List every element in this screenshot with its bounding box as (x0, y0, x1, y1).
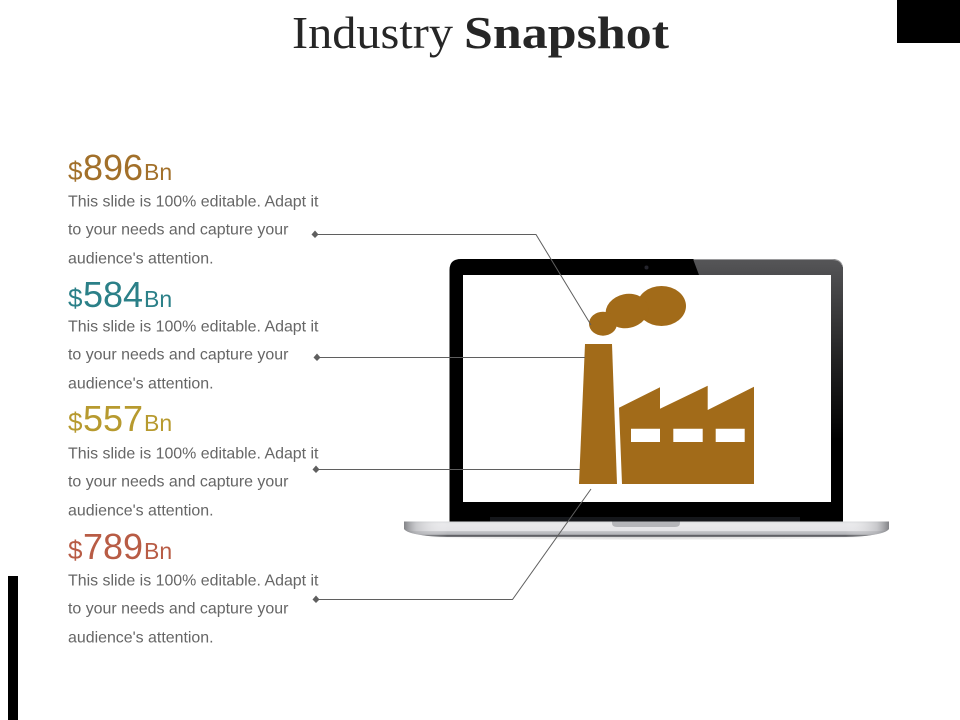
connector end markers (312, 230, 320, 603)
description 4: audience's attention. (68, 630, 214, 646)
decorative bar: bottom left (8, 576, 18, 720)
description 2: to your needs and capture your (68, 346, 289, 364)
description 1: This slide is 100% editable. Adapt it (68, 194, 319, 210)
title: Snapshot (464, 7, 670, 58)
value 896: $ (68, 156, 83, 186)
value 557: Bn (144, 410, 172, 436)
webcam (644, 266, 648, 270)
laptop base (404, 522, 889, 543)
value 896: 896 (83, 147, 143, 188)
value 584: Bn (144, 286, 172, 312)
chimney (579, 344, 617, 484)
description 2: This slide is 100% editable. Adapt it (68, 318, 319, 336)
stat block 2 (68, 274, 319, 392)
laptop illustration (404, 259, 889, 543)
description 4: This slide is 100% editable. Adapt it (68, 572, 319, 590)
connector 2 (317, 356, 585, 358)
connector 3 (316, 468, 580, 470)
description 3: to your needs and capture your (68, 474, 289, 490)
description 3: This slide is 100% editable. Adapt it (68, 446, 319, 462)
connector 4 (316, 489, 591, 600)
value 789: $ (68, 535, 83, 565)
description 1: to your needs and capture your (68, 222, 289, 238)
value 789: 789 (83, 526, 143, 567)
value 557: 557 (83, 398, 143, 439)
value 789: Bn (144, 538, 172, 564)
factory icon (579, 286, 754, 484)
smoke (589, 286, 686, 336)
value 584: 584 (83, 274, 143, 315)
factory building (619, 386, 754, 484)
laptop screen (463, 275, 831, 502)
lid glare (693, 259, 843, 440)
title (292, 7, 670, 58)
stat block 1 (68, 147, 319, 268)
value 584: $ (68, 283, 83, 313)
value 557: $ (68, 407, 83, 437)
connector 1 (315, 234, 591, 325)
description 3: audience's attention. (68, 502, 214, 520)
stat block 3 (68, 398, 319, 520)
description 1: audience's attention. (68, 250, 214, 268)
connector lines (315, 234, 591, 600)
stat block 4 (68, 526, 319, 646)
description 2: audience's attention. (68, 376, 214, 392)
laptop lid (450, 259, 843, 522)
title: Industry (292, 7, 453, 58)
description 4: to your needs and capture your (68, 600, 289, 618)
value 896: Bn (144, 159, 172, 185)
decorative block: top right (897, 0, 960, 43)
